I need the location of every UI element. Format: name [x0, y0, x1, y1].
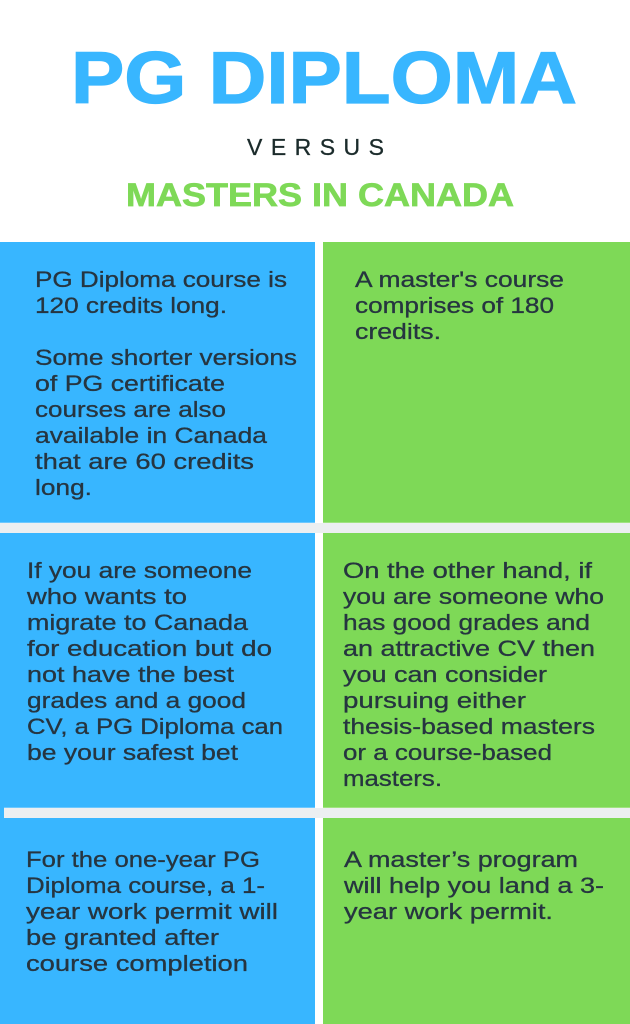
text: master's eligibility: thesis-based masters — [343, 714, 595, 739]
text: master's work permit — [343, 847, 604, 924]
text: master's work permit: year work permit. — [344, 899, 553, 924]
text: PG Diploma eligibility: not have the best — [27, 662, 234, 687]
heading: Masters in Canada: MASTERS IN CANADA — [126, 177, 514, 213]
text: master's credits: A master's course — [355, 267, 564, 292]
text: master's credits: credits. — [355, 319, 441, 344]
text: PG Diploma credits: 120 credits long. — [35, 293, 227, 318]
text: PG Diploma eligibility: CV, a PG Diploma can — [27, 714, 283, 739]
panel: blue eligibility — [0, 533, 315, 808]
text: PG Diploma credits: available in Canada — [35, 423, 268, 448]
panel: green credits — [323, 242, 630, 523]
text: master's work permit: will help you land a 3- — [343, 873, 604, 898]
text: PG Diploma work permit: Diploma course, a 1- — [26, 873, 265, 898]
title: PG Diploma: PG DIPLOMA — [71, 38, 577, 119]
panel: blue work permit — [0, 818, 315, 1024]
text: PG Diploma eligibility: migrate to Canada — [27, 610, 249, 635]
text: master's eligibility: you are someone who — [343, 584, 604, 609]
text: PG Diploma eligibility — [26, 558, 283, 765]
text: master's eligibility: masters. — [343, 766, 442, 791]
text: PG Diploma eligibility: for education but do — [27, 636, 272, 661]
text: PG Diploma work permit — [26, 847, 278, 976]
text: PG Diploma work permit: year work permit will — [26, 899, 278, 924]
text: master's eligibility: has good grades and — [343, 610, 590, 635]
text: PG Diploma credits: courses are also — [35, 397, 226, 422]
text: PG Diploma credits: long. — [35, 475, 92, 500]
text: PG Diploma eligibility: grades and a good — [27, 688, 246, 713]
text: PG Diploma credits: PG Diploma course is — [35, 267, 287, 292]
text: master's credits — [355, 267, 564, 344]
text: PG Diploma credits — [35, 267, 297, 500]
panel: green eligibility — [323, 533, 630, 808]
text: master's eligibility: or a course-based — [343, 740, 552, 765]
text: master's work permit: A master’s program — [344, 847, 578, 872]
text: PG Diploma credits: Some shorter versions — [35, 345, 297, 370]
text: master's credits: comprises of 180 — [355, 293, 554, 318]
text: PG Diploma eligibility: be your safest bet — [27, 740, 238, 765]
text: master's eligibility: you can consider — [343, 662, 547, 687]
text: PG Diploma eligibility: who wants to — [26, 584, 187, 609]
text: master's eligibility: On the other hand, if — [343, 558, 593, 583]
text: master's eligibility: an attractive CV then — [343, 636, 595, 661]
panel: green work permit — [323, 818, 630, 1024]
text: PG Diploma work permit: For the one-year PG — [26, 847, 260, 872]
text: PG Diploma work permit: be granted after — [26, 925, 219, 950]
subtitle: versus: VERSUS — [247, 134, 384, 160]
panel: blue credits — [0, 242, 315, 523]
text: PG Diploma credits: of PG certificate — [35, 371, 225, 396]
text: PG Diploma eligibility: If you are someone — [27, 558, 252, 583]
text: PG Diploma work permit: course completion — [26, 951, 248, 976]
text: PG Diploma credits: that are 60 credits — [35, 449, 254, 474]
text: master's eligibility — [343, 558, 604, 791]
text: master's eligibility: pursuing either — [343, 688, 526, 713]
